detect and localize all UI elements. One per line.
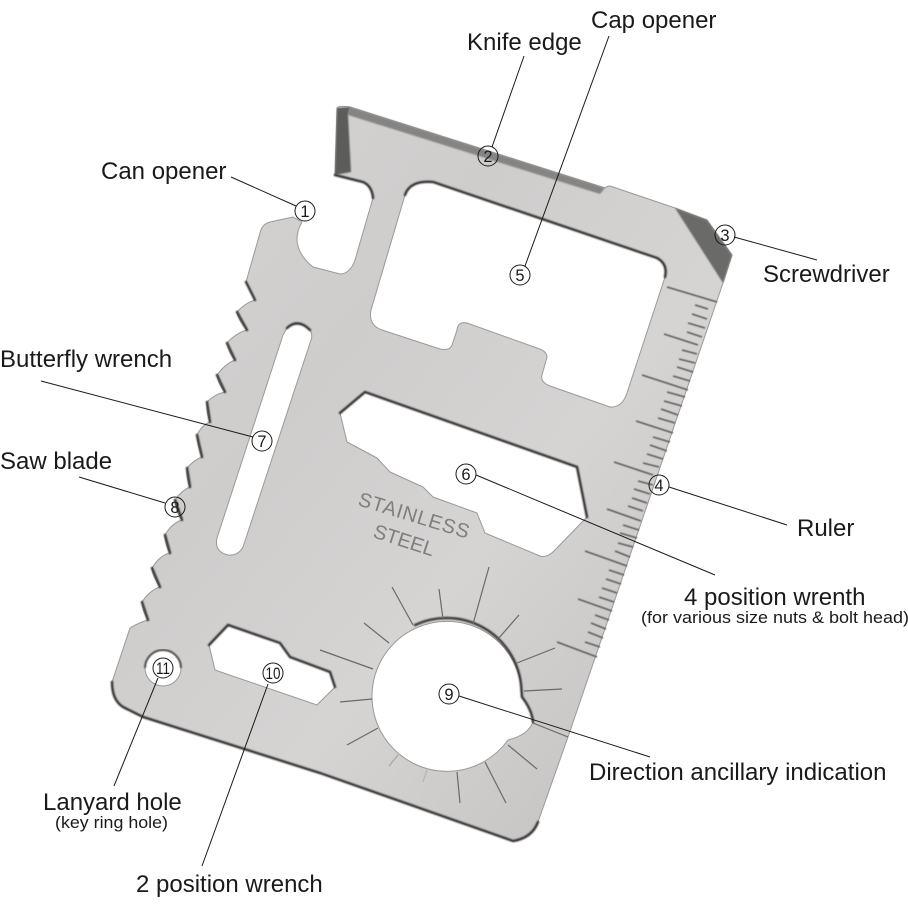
marker numbers: 11 <box>156 660 170 678</box>
marker numbers: 5 <box>515 267 525 285</box>
label: 4 position wrench <box>641 584 908 627</box>
label: can opener: Can opener <box>101 158 226 185</box>
marker numbers: 2 <box>483 148 493 166</box>
label: direction ancillary indication: Direction ancillary indication <box>589 759 886 786</box>
label: saw blade: Saw blade <box>0 448 112 475</box>
leader lines <box>41 36 817 866</box>
label: lanyard hole <box>43 789 182 832</box>
marker numbers: 10 <box>266 665 280 683</box>
label: butterfly wrench: Butterfly wrench <box>0 346 172 373</box>
ruler ticks <box>557 287 717 657</box>
marker numbers <box>156 148 730 704</box>
stamped text: stainless steel: STAINLESS <box>356 489 472 543</box>
label: 4 position wrench: 4 position wrenth <box>684 584 865 611</box>
label: 4 position wrench: (for various size nuts & bolt head) <box>641 608 908 627</box>
card body <box>112 106 732 841</box>
label: knife edge: Knife edge <box>467 29 582 56</box>
marker numbers: 7 <box>257 433 267 451</box>
screwdriver tip <box>675 208 732 283</box>
left bevel <box>335 107 351 175</box>
marker numbers: 8 <box>170 499 180 517</box>
direction indication rays <box>320 567 568 803</box>
lanyard hole rim <box>145 650 181 668</box>
marker numbers: 9 <box>444 686 454 704</box>
label: lanyard hole: (key ring hole) <box>55 813 168 832</box>
marker numbers: 6 <box>461 466 471 484</box>
marker numbers: 1 <box>300 203 310 221</box>
label: screwdriver: Screwdriver <box>763 261 890 288</box>
numbered markers <box>153 146 735 704</box>
marker numbers: 4 <box>654 477 664 495</box>
label: ruler: Ruler <box>797 515 854 542</box>
label: 2 position wrench: 2 position wrench <box>136 871 323 898</box>
label: cap opener: Cap opener <box>591 7 716 34</box>
knife edge bevel <box>348 107 605 194</box>
label: lanyard hole: Lanyard hole <box>43 789 182 816</box>
marker numbers: 3 <box>720 227 730 245</box>
dark hole edges <box>112 175 666 841</box>
stamped text: stainless steel: STEEL <box>370 521 437 561</box>
multi-tool card <box>112 106 732 841</box>
